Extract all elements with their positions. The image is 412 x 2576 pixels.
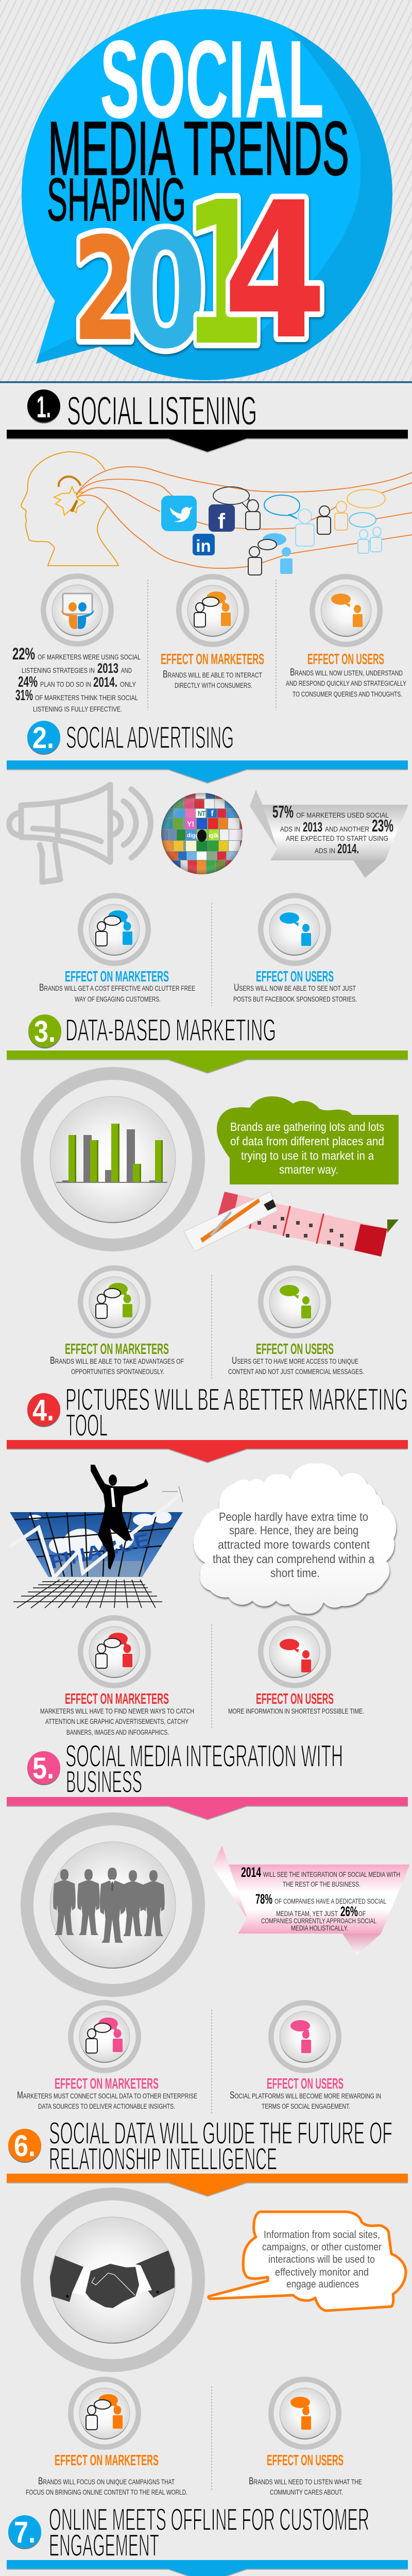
orange outlined speech cloud: Information from social sites,: [264, 2229, 380, 2241]
stats text: [12, 645, 141, 713]
icon: speech bubble black: [213, 487, 249, 508]
effect on users: [233, 893, 357, 1003]
effect on marketers: EFFECT ON MARKETERS: [161, 651, 264, 668]
year 2014: 2: [73, 208, 139, 373]
effect on users: [230, 2000, 381, 2110]
panel: 3 data-based marketing: [7, 1013, 408, 1379]
icon: linkedin: in: [196, 536, 211, 555]
stat column: [12, 573, 141, 713]
number badge 5: 5.: [32, 1752, 54, 1785]
panel: 6 relationship intelligence: [7, 2116, 408, 2496]
ribbon callout: ADS IN: [315, 846, 335, 855]
illustration: finance building and jumping man: FINANCE: [48, 1529, 152, 1573]
effect on marketers: FOCUS ON BRINGING ONLINE CONTENT TO THE REAL WORLD.: [26, 2488, 187, 2496]
stats text: 2014.: [93, 674, 117, 690]
section bar: [7, 430, 408, 453]
stats text: 31%: [15, 687, 33, 704]
section bar: [7, 760, 408, 784]
globe of social icons: digg: [187, 833, 199, 839]
effect on users: POSTS BUT FACEBOOK SPONSORED STORIES.: [233, 995, 357, 1003]
effect on marketers: EFFECT ON MARKETERS: [55, 2076, 159, 2092]
white cloud callout: short time.: [270, 1566, 320, 1580]
effect on users: MORE INFORMATION IN SHORTEST POSSIBLE TIME.: [228, 1707, 364, 1715]
green cloud callout: trying to use it to market in a: [241, 1149, 374, 1162]
number badge 7: 7.: [14, 2516, 36, 2549]
heading: BUSINESS: [66, 1765, 142, 1799]
orange outlined speech cloud: engage audiences: [286, 2279, 359, 2290]
number badge 1: [27, 389, 60, 424]
effect on marketers: BANNERS, IMAGES AND INFOGRAPHICS.: [66, 1728, 169, 1736]
ribbon callout: 23%: [372, 816, 393, 835]
green cloud callout: Brands are gathering lots and lots: [230, 1120, 384, 1133]
white cloud callout: People hardly have extra time to: [219, 1510, 368, 1523]
section bar: [7, 1050, 408, 1074]
stats text: 24%: [18, 674, 38, 690]
stats text: LISTENING STRATEGIES IN: [22, 666, 95, 674]
ring icon: slideshare: [41, 573, 114, 647]
ring with silhouettes: [21, 1812, 205, 1997]
heading: TOOL: [66, 1408, 108, 1443]
effect on marketers: ATTENTION LIKE GRAPHIC ADVERTISEMENTS, CATCHY: [45, 1717, 188, 1725]
effect on marketers: MARKETERS MUST CONNECT SOCIAL DATA TO OTHER ENTERPRISE: [17, 2090, 197, 2101]
effect on marketers: BRANDS WILL BE ABLE TO INTERACT: [163, 669, 262, 680]
effect on marketers: WAY OF ENGAGING CUSTOMERS.: [75, 995, 161, 1003]
ribbon callout: 2013: [303, 819, 322, 835]
effect on marketers: MARKETERS WILL HAVE TO FIND NEWER WAYS TO CATCH: [40, 1707, 194, 1715]
panel: 5 integration with business: [7, 1739, 410, 2113]
effect on marketers: EFFECT ON MARKETERS: [65, 969, 169, 985]
ring with bar chart: [21, 1067, 205, 1251]
effect on marketers: BRANDS WILL GET A COST EFFECTIVE AND CLUTTER FREE: [39, 982, 195, 993]
stats text: OF MARKETERS WERE USING SOCIAL: [38, 653, 141, 661]
white cloud callout: [194, 1463, 396, 1614]
globe of social icons: qik: [209, 832, 219, 839]
speech bubble: [22, 9, 392, 380]
effect on marketers: BRANDS WILL FOCUS ON UNIQUE CAMPAIGNS THAT: [38, 2476, 175, 2487]
effect on users: EFFECT ON USERS: [267, 2076, 344, 2092]
pink ribbon callout: THE REST OF THE BUSINESS.: [283, 1880, 360, 1888]
effect on users: COMMUNITY CARES ABOUT.: [270, 2488, 343, 2496]
stats text: 22%: [12, 645, 35, 663]
icon: megaphone: [9, 785, 150, 882]
pink ribbon callout: MEDIA HOLISTICALLY.: [291, 1924, 348, 1932]
stats text: 2013: [97, 660, 118, 676]
crowd of people: [246, 489, 385, 575]
ribbon callout: [250, 790, 408, 878]
ribbon callout: OF MARKETERS USED SOCIAL: [296, 811, 389, 819]
orange outlined speech cloud: effectively monitor and: [275, 2267, 369, 2278]
green cloud callout: of data from different places and: [230, 1134, 384, 1148]
globe of social icons: f: [211, 809, 214, 818]
white cloud callout: that they can comprehend within a: [213, 1552, 374, 1566]
effect on users: EFFECT ON USERS: [267, 2452, 344, 2469]
icon: linkedin: [193, 534, 215, 555]
stats text: ONLY: [120, 680, 136, 688]
globe of social icons: [161, 792, 245, 875]
effect on users: [286, 574, 406, 698]
ribbon callout: 57%: [272, 802, 294, 821]
panel: 1 social listening: [7, 388, 412, 713]
orange outlined speech cloud: interactions will be used to: [268, 2254, 375, 2265]
heading: [65, 1382, 408, 1443]
effect on marketers: DIRECTLY WITH CONSUMERS.: [175, 681, 252, 689]
effect on marketers: DATA SOURCES TO DELIVER ACTIONABLE INSIGHTS.: [38, 2102, 175, 2110]
ribbon callout: ARE EXPECTED TO START USING: [286, 834, 388, 842]
pink ribbon callout: 26%: [340, 1904, 358, 1919]
heading: [49, 2116, 392, 2176]
effect on marketers: [39, 893, 195, 1003]
number badge 2: 2.: [32, 721, 54, 755]
effect on marketers: [40, 1615, 194, 1736]
effect on marketers: EFFECT ON MARKETERS: [65, 1341, 169, 1358]
stats text: LISTENING IS FULLY EFFECTIVE.: [33, 705, 122, 713]
ribbon callout: 2014.: [337, 841, 359, 856]
section bar: [7, 2174, 408, 2197]
effect on users: USERS WILL NOW BE ABLE TO SEE NOT JUST: [234, 982, 356, 993]
infographic papers: [184, 1192, 399, 1257]
illustration: listening head and network: [21, 452, 412, 568]
green cloud callout: smarter way.: [279, 1163, 338, 1176]
stats text: AND: [121, 666, 132, 674]
effect on users: TERMS OF SOCIAL ENGAGEMENT.: [262, 2102, 350, 2110]
pink ribbon callout: [212, 1846, 410, 1955]
effect on marketers: OPPORTUNITIES SPONTANEOUSLY.: [71, 1367, 164, 1376]
white cloud callout: attracted more towards content: [218, 1538, 370, 1551]
globe of social icons: Y!: [187, 820, 194, 828]
pink ribbon callout: 78%: [255, 1891, 272, 1907]
divider under header: [0, 381, 412, 383]
effect on users: EFFECT ON USERS: [256, 1691, 334, 1707]
striped background: [0, 0, 412, 381]
globe of social icons: NT: [198, 809, 205, 818]
effect on users: BRANDS WILL NEED TO LISTEN WHAT THE: [249, 2476, 362, 2487]
stats text: OF MARKETERS THINK THEIR SOCIAL: [35, 693, 138, 702]
panel: 7 online meets offline: [7, 2502, 408, 2576]
ribbon callout: AND ANOTHER: [325, 825, 369, 833]
effect on marketers: [161, 574, 264, 689]
effect on users: CONTENT AND NOT JUST COMMERCIAL MESSAGES.: [228, 1367, 364, 1376]
orange outlined speech cloud: campaigns, or other customer: [262, 2242, 382, 2253]
heading: [49, 2502, 369, 2563]
section bar: [7, 1797, 408, 1820]
effect on users: USERS GET TO HAVE MORE ACCESS TO UNIQUE: [232, 1355, 358, 1366]
number badge 1: 1.: [37, 391, 51, 424]
effect on marketers: [17, 2000, 197, 2110]
heading: ENGAGEMENT: [49, 2528, 159, 2563]
white cloud callout: spare. Hence, they are being: [229, 1523, 358, 1537]
ribbon callout: ADS IN: [280, 825, 300, 833]
orange outlined speech cloud: [209, 2212, 406, 2311]
effect on marketers: [26, 2377, 187, 2496]
stats text: PLAN TO DO SO IN: [40, 680, 91, 688]
year 2014: [73, 160, 327, 389]
panel: 4 pictures: [7, 1382, 408, 1736]
effect on users: [228, 1615, 364, 1715]
pink ribbon callout: OF: [358, 1909, 366, 1918]
pink ribbon callout: MEDIA TEAM, YET JUST: [276, 1909, 338, 1918]
effect on marketers: [50, 1265, 184, 1376]
panel: title header: [0, 0, 412, 389]
year 2014: 1: [183, 160, 265, 389]
illustration: finance building and jumping man: [10, 1465, 183, 1608]
effect on users: [228, 1265, 364, 1376]
ring with handshake: [21, 2188, 205, 2372]
number badge 4: 4.: [32, 1394, 54, 1427]
effect on users: EFFECT ON USERS: [256, 969, 334, 985]
section bar: [7, 2560, 408, 2576]
green cloud callout: [217, 1096, 399, 1184]
panel: 2 social advertising: [7, 720, 408, 1006]
effect on marketers: EFFECT ON MARKETERS: [55, 2452, 159, 2469]
icon: facebook: [209, 504, 235, 533]
number badge 6: 6.: [14, 2129, 36, 2163]
pink ribbon callout: 2014: [241, 1865, 261, 1880]
heading: [65, 1739, 343, 1799]
icon: facebook: f: [218, 509, 226, 533]
effect on marketers: EFFECT ON MARKETERS: [65, 1691, 169, 1707]
effect on users: EFFECT ON USERS: [256, 1341, 334, 1358]
heading: SOCIAL ADVERTISING: [66, 720, 234, 755]
icon: twitter: [161, 496, 197, 531]
year 2014: 4: [224, 162, 327, 381]
title: SHAPING: SHAPING: [47, 166, 186, 234]
section bar: [7, 1440, 408, 1463]
number badge 3: 3.: [34, 1015, 56, 1048]
year 2014: 0: [125, 200, 207, 384]
effect on users: [249, 2377, 362, 2496]
effect on marketers: BRANDS WILL BE ABLE TO TAKE ADVANTAGES OF: [50, 1355, 184, 1366]
